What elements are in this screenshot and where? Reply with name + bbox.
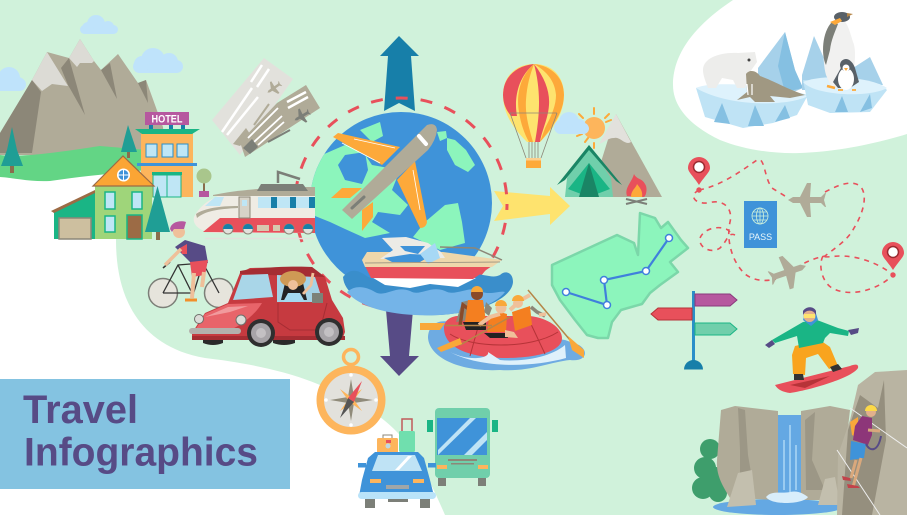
passport	[744, 201, 777, 248]
plane tail	[331, 188, 373, 231]
plane icon: lower	[765, 250, 811, 294]
pants	[792, 340, 838, 375]
walrus	[737, 71, 805, 102]
plane wing: left	[333, 133, 400, 165]
air tickets	[212, 58, 320, 157]
hotel	[135, 112, 200, 197]
ice floe: right	[803, 77, 887, 113]
white region: polar bay	[673, 0, 907, 153]
yellow arrow right	[494, 187, 570, 225]
title	[23, 388, 258, 474]
snowboard	[775, 365, 858, 393]
paddles	[420, 290, 584, 358]
arrow down: purple	[380, 310, 419, 376]
tree: by hotel	[121, 125, 137, 158]
direction signpost	[651, 291, 737, 370]
door line	[278, 303, 327, 330]
blue car	[358, 452, 436, 508]
campsite	[554, 108, 662, 204]
potted tree	[196, 168, 212, 197]
location pin: end	[882, 242, 904, 278]
train	[194, 172, 315, 238]
continent: east	[447, 138, 475, 172]
campfire	[626, 174, 647, 204]
hotel sign: HOTEL	[152, 114, 183, 126]
rafting group	[420, 286, 585, 370]
emperor penguin	[823, 12, 855, 88]
cyclist	[148, 221, 234, 308]
background top left	[0, 0, 31, 91]
cloud: top left	[80, 15, 118, 34]
hot air balloon	[503, 64, 564, 168]
rafter: front	[510, 295, 546, 331]
continent: south east	[413, 203, 465, 250]
ice floe: left	[696, 84, 808, 128]
red car	[189, 267, 345, 347]
windshield	[233, 274, 273, 300]
plane fuselage	[342, 124, 437, 219]
continent: west	[305, 145, 408, 238]
gloves	[765, 328, 859, 348]
title panel	[0, 379, 290, 489]
passport: PASS	[749, 232, 772, 242]
title: Infographics	[24, 430, 258, 474]
continent: north	[360, 122, 383, 142]
map with route	[552, 213, 688, 338]
tent	[557, 145, 622, 197]
tree: left of mountains	[1, 127, 23, 173]
polar bear	[703, 52, 757, 88]
ticket: dark	[240, 85, 320, 157]
cloud by sun	[554, 112, 589, 134]
rafter: back	[456, 286, 492, 330]
speedboat	[362, 237, 502, 288]
snowboarder	[765, 307, 859, 393]
headlights	[194, 314, 246, 325]
inland sea	[338, 152, 368, 184]
car body	[192, 267, 345, 340]
plane icon: upper	[788, 183, 826, 217]
orange suitcase	[377, 435, 398, 453]
compass	[316, 350, 386, 434]
bus	[427, 408, 498, 486]
waterfall and rocks	[692, 370, 907, 515]
ticket: light	[212, 58, 293, 155]
globe	[312, 112, 492, 280]
green suitcase	[399, 419, 415, 452]
water pool	[428, 321, 585, 370]
wheels	[247, 318, 343, 347]
splash	[766, 491, 808, 503]
tree: by house	[145, 186, 170, 240]
car under shadow	[203, 339, 295, 345]
cyclist head	[170, 221, 186, 238]
pool	[713, 499, 843, 515]
cloud: centre left	[133, 48, 183, 73]
ropes	[837, 408, 907, 515]
waves	[343, 271, 513, 315]
rafter: middle	[479, 300, 518, 338]
house with garage	[51, 156, 154, 239]
bush	[692, 439, 729, 502]
mountains	[0, 39, 165, 155]
sun	[577, 108, 611, 148]
cyclist shorts	[190, 260, 208, 277]
location pin: start	[688, 157, 710, 193]
dashed red orbit	[295, 98, 507, 310]
falling water	[778, 415, 801, 497]
climbing cliff	[837, 370, 907, 515]
car hood	[194, 303, 262, 332]
title: Travel	[23, 388, 138, 432]
right rock	[801, 406, 850, 500]
driver	[280, 271, 313, 302]
passport globe icon	[752, 208, 768, 224]
green hill	[0, 146, 165, 181]
snow mountain	[590, 114, 662, 197]
cloud: far left	[0, 67, 26, 91]
airplane	[331, 124, 437, 231]
plane wing: right	[397, 161, 427, 228]
iceberg peaks	[758, 32, 883, 100]
dashed flight routes	[694, 160, 893, 292]
route line	[566, 238, 669, 305]
arrow up: blue	[380, 36, 419, 111]
boots	[794, 364, 842, 380]
left rock	[717, 406, 778, 500]
bumper	[189, 328, 241, 334]
inflatable raft	[444, 316, 562, 358]
baby penguin	[833, 59, 859, 90]
polar scene	[696, 12, 887, 128]
island: north east	[437, 131, 447, 141]
jacket	[772, 320, 849, 348]
car seat	[312, 293, 323, 303]
climber	[842, 405, 881, 488]
head	[803, 307, 818, 326]
cyclist torso	[175, 240, 208, 263]
side window	[277, 275, 323, 302]
